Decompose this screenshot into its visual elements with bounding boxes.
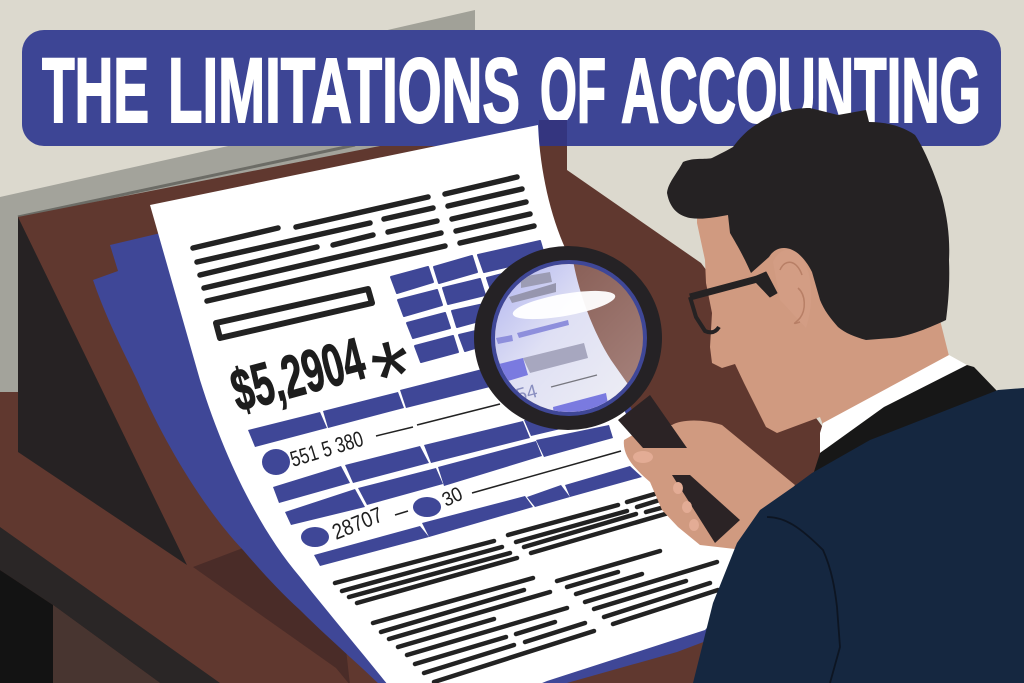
number: 551 5 380: 551 5 380	[287, 426, 366, 472]
paper document	[150, 125, 760, 683]
grey backing board	[0, 10, 480, 395]
blue table grid	[391, 241, 545, 362]
brown desk	[0, 120, 830, 683]
man: hair	[667, 108, 949, 340]
amount figure: *	[361, 317, 428, 435]
thin rules	[376, 404, 621, 515]
header text lines	[193, 177, 534, 301]
magnifier rim	[474, 246, 662, 430]
desk darker panel	[193, 548, 350, 683]
fingers over handle	[633, 448, 712, 531]
title text: LIMITATIONS	[168, 40, 520, 142]
man: suit jacket	[693, 388, 1024, 683]
man: face and neck	[697, 200, 949, 433]
magnifier handle	[618, 395, 740, 543]
man: ear	[773, 250, 811, 328]
lower body text lines	[335, 493, 718, 682]
magnifier lens: 54	[514, 381, 540, 407]
title text: OF	[540, 40, 606, 142]
banner overlap shadow	[539, 120, 567, 146]
blue sheet behind paper	[93, 200, 730, 683]
hand	[624, 420, 795, 549]
title text	[42, 40, 981, 142]
number: 28707: 28707	[329, 502, 386, 545]
amount figure: $5,2904	[224, 325, 372, 425]
blue data bars	[248, 367, 642, 566]
title banner	[22, 30, 1001, 146]
man: glasses	[690, 272, 777, 332]
magnifier lens	[495, 264, 643, 412]
leg inner panel	[53, 605, 160, 683]
number: 30: 30	[439, 483, 466, 512]
black leg	[0, 570, 53, 683]
desk shadow wedge	[18, 217, 187, 565]
man: shirt collar	[820, 355, 967, 453]
jacket sleeve seam	[767, 517, 840, 683]
outlined input box	[216, 289, 372, 338]
man: suit lapel	[812, 365, 998, 478]
title text: THE	[42, 40, 149, 142]
dark band under desk	[0, 527, 220, 683]
icon: magnifying glass	[474, 246, 740, 543]
